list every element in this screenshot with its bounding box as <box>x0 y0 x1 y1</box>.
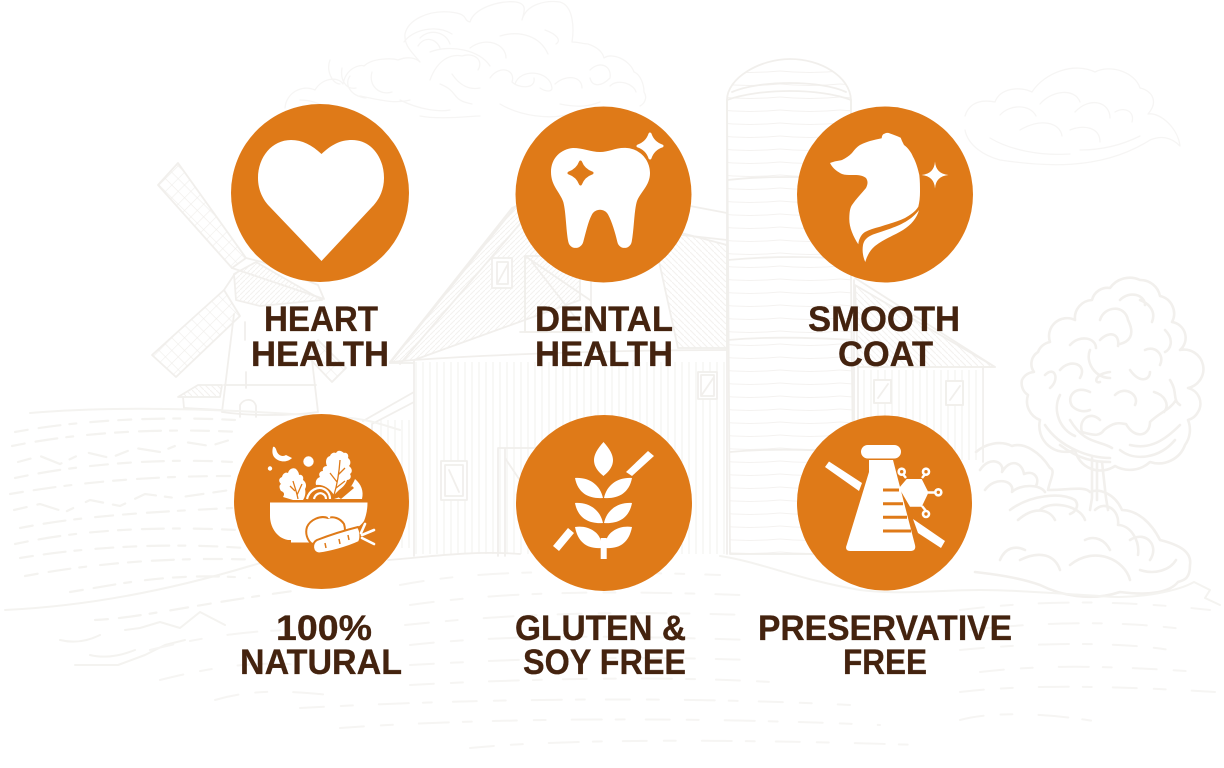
label: dental health <box>535 300 673 374</box>
icon: flask and molecule crossed out <box>797 416 972 590</box>
silo <box>727 59 854 554</box>
panel: gluten and soy free <box>515 415 692 682</box>
label: 100% natural: NATURAL <box>240 643 402 682</box>
field: right <box>960 602 1215 722</box>
barn <box>363 180 727 560</box>
label: 100% natural: 100% <box>276 609 372 648</box>
icon: salad bowl <box>234 414 409 589</box>
label: gluten and soy free <box>515 609 686 682</box>
label: heart health: HEART <box>264 300 378 339</box>
panel: heart health <box>231 104 409 374</box>
label: smooth coat <box>808 300 960 374</box>
label: preservative free <box>758 609 1012 682</box>
icon: dog with sparkle <box>797 106 973 282</box>
field: left <box>5 409 400 700</box>
label: dental health: HEALTH <box>535 335 673 374</box>
label: smooth coat: COAT <box>838 335 933 374</box>
field: bottom <box>300 556 1220 748</box>
label: gluten and soy free: GLUTEN & <box>515 609 686 648</box>
cloud: upper right <box>965 68 1180 165</box>
label: 100% natural <box>240 609 402 682</box>
label: preservative free: PRESERVATIVE <box>758 609 1012 648</box>
panel: dental health <box>516 106 692 374</box>
icon: tooth <box>516 106 692 282</box>
label: heart health: HEALTH <box>251 335 389 374</box>
bushes <box>975 443 1190 597</box>
icon: heart <box>231 104 409 282</box>
label: preservative free: FREE <box>843 643 927 682</box>
barn: right of silo <box>855 278 995 462</box>
cloud: upper left <box>285 2 646 118</box>
label: dental health: DENTAL <box>535 300 673 339</box>
label: smooth coat: SMOOTH <box>808 300 960 339</box>
icon: wheat crossed out <box>516 415 692 591</box>
label: heart health <box>251 300 389 374</box>
windmill <box>152 163 346 417</box>
label: gluten and soy free: SOY FREE <box>523 643 686 682</box>
tree <box>1022 278 1203 510</box>
panel: smooth coat <box>797 106 973 374</box>
panel: 100% natural <box>234 414 409 682</box>
panel: preservative free <box>758 416 1012 682</box>
